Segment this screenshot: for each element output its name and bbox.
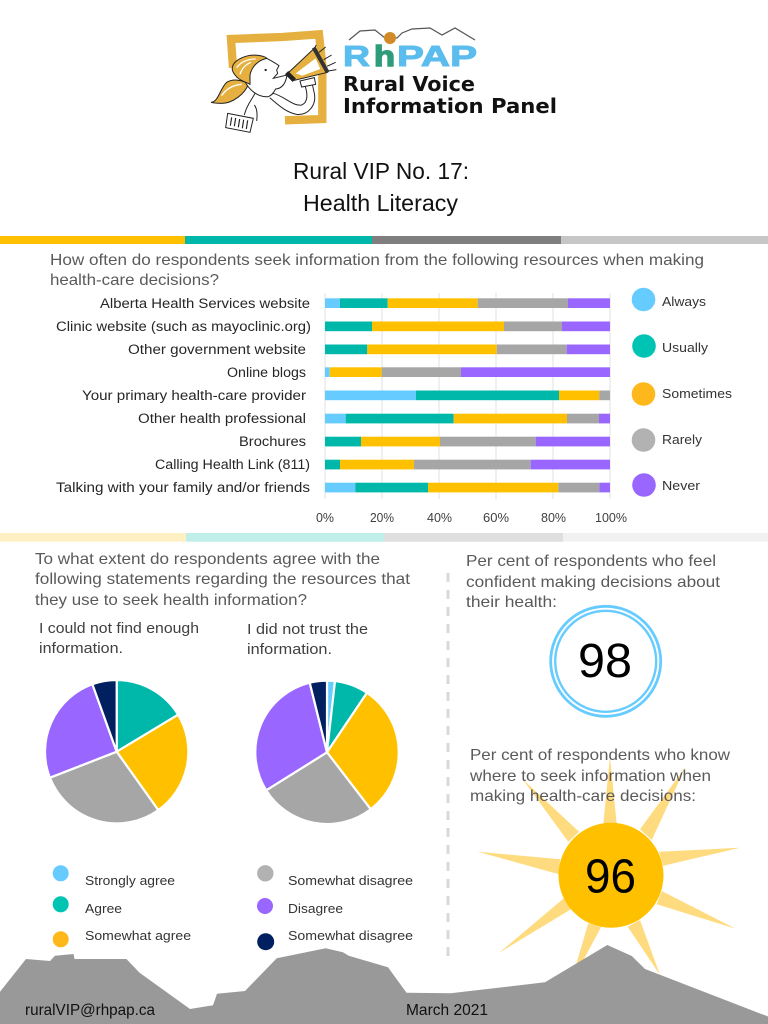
axis labels: 60% — [483, 511, 509, 525]
legend: agreement: Strongly agree — [85, 873, 175, 888]
subheading: could not find: I could not find enough — [39, 621, 199, 637]
logo text: Rural Voice: Rural Voice — [343, 72, 475, 96]
legend: agreement: Agree — [85, 901, 122, 916]
row labels — [56, 296, 311, 495]
subheading: could not find — [39, 621, 199, 657]
stat: 98 in double ring: 98 — [578, 635, 632, 688]
legend: frequency: Never — [662, 478, 701, 493]
axis labels: 100% — [595, 511, 627, 525]
bars — [325, 298, 610, 492]
stat number: 96 — [585, 851, 636, 904]
legend: frequency — [632, 288, 733, 497]
row labels: Talking with your family and/or friends — [56, 480, 310, 495]
logo text: Information Panel: Information Panel — [343, 94, 557, 118]
legend: agreement: Somewhat disagree — [288, 873, 413, 888]
legend: agreement: Disagree — [288, 901, 343, 916]
axis labels: 40% — [427, 511, 452, 525]
subheading: could not find: information. — [39, 641, 123, 657]
legend: agreement — [53, 865, 413, 950]
text: confident making decisions — [466, 553, 721, 611]
pie chart: could not find enough information — [45, 680, 188, 823]
wordmark: RhPAP: R — [343, 41, 370, 73]
title: Health Literacy — [303, 190, 458, 216]
subheading: did not trust: I did not trust the — [247, 622, 368, 638]
divider: dashed vertical line — [446, 573, 450, 962]
sun rays — [478, 757, 740, 985]
axis labels: 20% — [370, 511, 394, 525]
heading: frequency question: health-care decisions? — [50, 272, 219, 289]
text: know where to seek information: making health-care decisions: — [470, 788, 696, 805]
footer: email: ruralVIP@rhpap.ca — [25, 1002, 155, 1019]
lower colour stripe — [0, 533, 768, 542]
heading: agreement question: To what extent do respondents agree with the — [35, 551, 380, 568]
row labels: Other health professional — [138, 411, 306, 426]
pie chart: did not trust the information — [255, 681, 399, 824]
wordmark: RhPAP: h — [374, 41, 395, 73]
heading: frequency question: How often do respondents seek information from the following resources when making — [50, 252, 704, 269]
stat: 98 in double ring — [551, 606, 661, 716]
heading: agreement question: following statements regarding the resources that — [35, 571, 411, 588]
row labels: Other government website — [128, 342, 306, 357]
title — [293, 158, 469, 216]
legend: agreement: Somewhat agree — [85, 928, 191, 943]
text: confident making decisions: confident making decisions about — [466, 574, 721, 591]
row labels: Calling Health Link (811) — [155, 457, 310, 472]
top colour stripe — [0, 236, 768, 244]
panel: stacked bar chart — [56, 293, 627, 525]
axis labels: 80% — [541, 511, 566, 525]
chart grid lines — [325, 293, 610, 499]
legend: agreement: Somewhat disagree — [288, 928, 413, 943]
legend: frequency: Usually — [662, 340, 709, 355]
text: know where to seek information: Per cent of respondents who know — [470, 747, 730, 764]
legend: frequency: Rarely — [662, 432, 703, 447]
axis labels — [316, 511, 627, 525]
footer: mountain silhouette — [0, 945, 768, 1024]
icon: mountain outline with sun — [349, 28, 475, 44]
row labels: Brochures — [239, 434, 306, 449]
text: know where to seek information — [469, 747, 730, 805]
title: Rural VIP No. 17: — [293, 158, 469, 184]
text: confident making decisions: Per cent of respondents who feel — [466, 553, 716, 570]
icon: woman with megaphone in yellow frame — [211, 34, 336, 132]
subheading: did not trust — [247, 622, 368, 658]
heading: agreement question: they use to seek health information? — [35, 592, 307, 609]
wordmark: RhPAP: PAP — [397, 41, 477, 73]
row labels: Your primary health-care provider — [82, 388, 307, 403]
text: confident making decisions: their health: — [466, 594, 557, 611]
heading: frequency question — [50, 252, 704, 289]
axis labels: 0% — [316, 511, 334, 525]
legend: frequency: Sometimes — [662, 386, 733, 401]
legend: frequency: Always — [662, 294, 707, 309]
row labels: Clinic website (such as mayoclinic.org) — [56, 319, 311, 334]
subheading: did not trust: information. — [247, 642, 332, 658]
logo: Rural Voice Information Panel — [211, 28, 557, 132]
footer: date: March 2021 — [406, 1002, 488, 1019]
text: know where to seek information: where to seek information when — [469, 768, 711, 785]
row labels: Alberta Health Services website — [100, 296, 310, 311]
row labels: Online blogs — [227, 365, 306, 380]
icon: sun with stat 96 — [478, 757, 740, 985]
heading: agreement question — [35, 551, 411, 609]
wordmark: RhPAP — [343, 41, 477, 73]
sun disc — [558, 823, 664, 928]
